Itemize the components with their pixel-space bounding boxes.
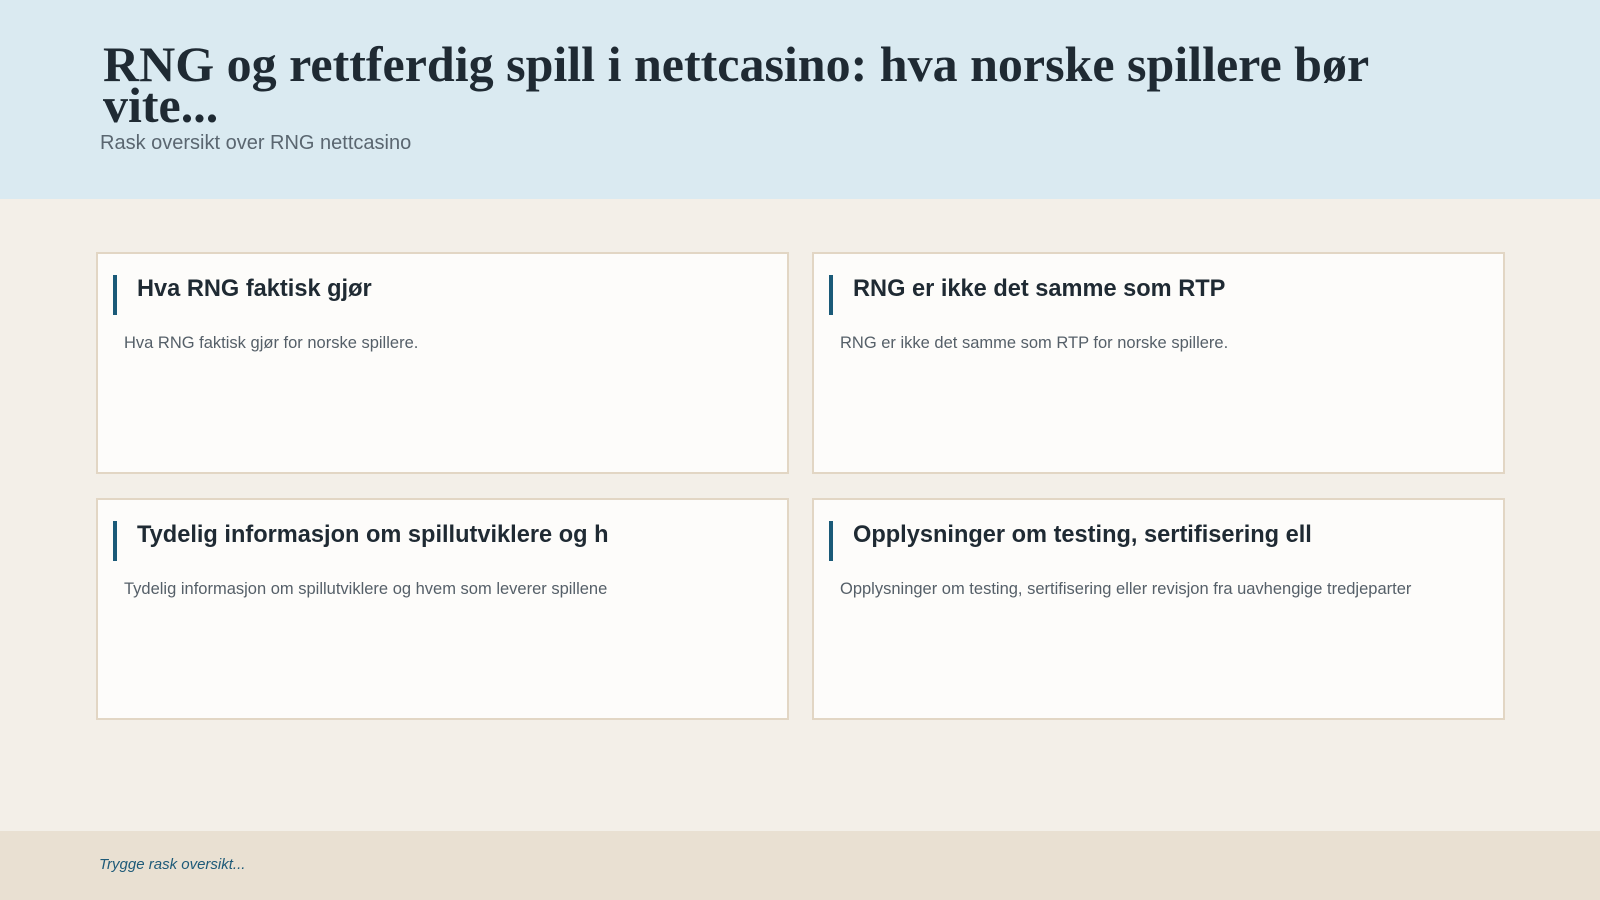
- panel: spillutviklere: [96, 498, 789, 720]
- text: Tydelig informasjon om spillutviklere og hvem som leverer spillene: [124, 580, 607, 598]
- text: RNG er ikke det samme som RTP for norske spillere.: [840, 334, 1228, 352]
- footer: [0, 831, 1600, 900]
- title: RNG og rettferdig spill i nettcasino: hva norske spillere bør vite...: [103, 36, 1368, 133]
- heading: RNG er ikke det samme som RTP: [853, 276, 1225, 302]
- footer text: Trygge rask oversikt...: [99, 856, 245, 873]
- panel: RNG vs RTP: [812, 252, 1505, 474]
- subtitle: Rask oversikt over RNG nettcasino: [100, 132, 411, 154]
- accent bar: [113, 275, 117, 315]
- panel: Hva RNG faktisk gjør: [96, 252, 789, 474]
- text: Hva RNG faktisk gjør for norske spillere.: [124, 334, 418, 352]
- heading: Hva RNG faktisk gjør: [137, 276, 372, 302]
- text: Opplysninger om testing, sertifisering eller revisjon fra uavhengige tredjeparter: [840, 580, 1411, 598]
- heading: Tydelig informasjon om spillutviklere og h: [137, 522, 609, 548]
- heading: Opplysninger om testing, sertifisering ell: [853, 522, 1312, 548]
- panel: testing: [812, 498, 1505, 720]
- accent bar: [829, 521, 833, 561]
- accent bar: [113, 521, 117, 561]
- header: [0, 0, 1600, 199]
- accent bar: [829, 275, 833, 315]
